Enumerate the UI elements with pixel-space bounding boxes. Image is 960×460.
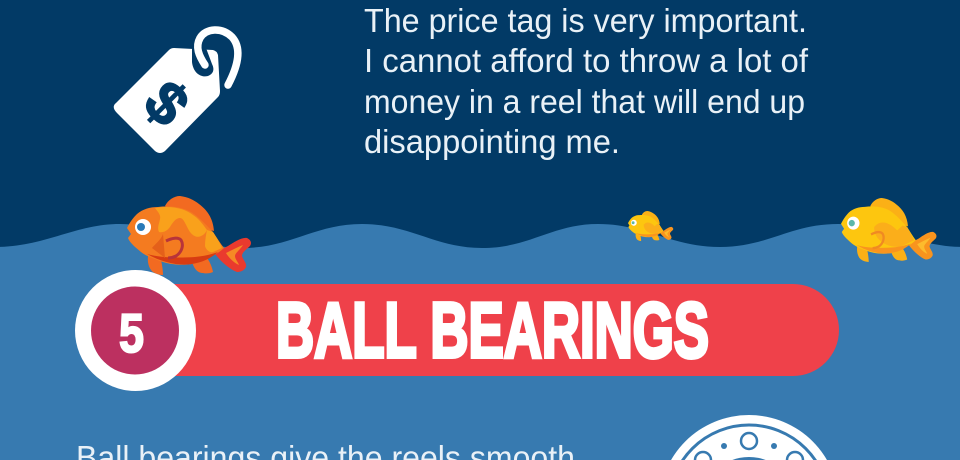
text block: price tag paragraph: money in a reel that will end up: [364, 83, 805, 120]
number badge: 5: [75, 270, 196, 391]
heading text: BALL BEARINGS: [276, 286, 709, 374]
fish: large orange: [127, 196, 251, 275]
fish: small yellow: [628, 211, 673, 241]
text block: price tag paragraph: disappointing me.: [364, 123, 620, 160]
text block: price tag paragraph: I cannot afford to throw a lot of: [364, 42, 809, 79]
text block: price tag paragraph: [364, 2, 809, 160]
heading banner: ball bearings: [135, 284, 839, 376]
dollar sign: $: [131, 68, 202, 139]
number badge: 5: 5: [119, 302, 144, 364]
wave: lighter blue water: [0, 224, 960, 460]
icon: ball bearing: [659, 415, 839, 460]
text block: price tag paragraph: The price tag is very important.: [364, 2, 807, 39]
fish: large yellow: [841, 198, 936, 262]
icon: price tag: [114, 30, 238, 153]
